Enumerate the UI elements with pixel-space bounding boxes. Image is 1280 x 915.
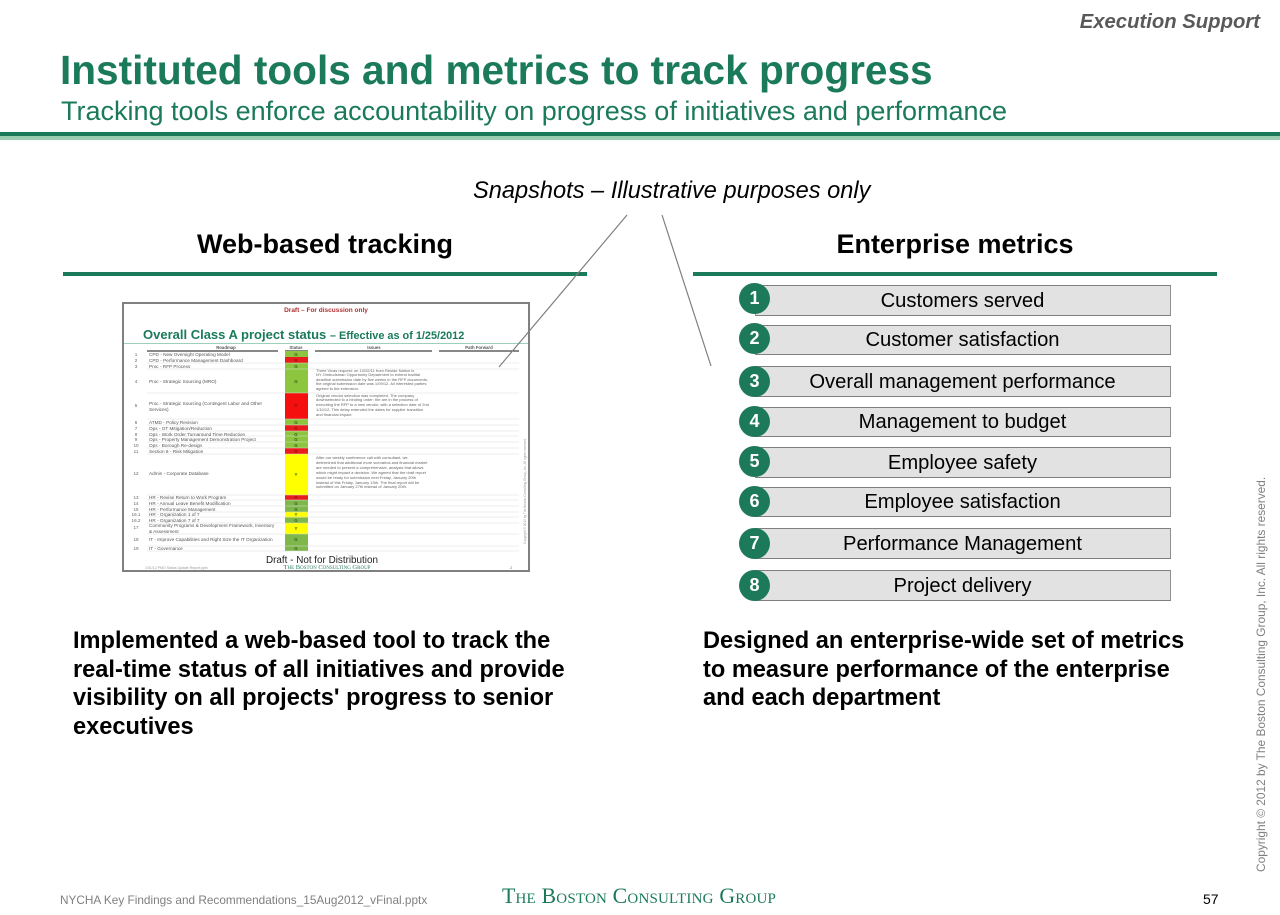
status letters: Y bbox=[295, 526, 298, 531]
row names: CPD - New Oversight Operating Model bbox=[149, 352, 230, 357]
status letters: R bbox=[294, 495, 298, 500]
status letters: G bbox=[294, 507, 298, 512]
row names: HR - Organization 1 of 7 bbox=[149, 512, 200, 517]
row names: Ops - Property Management Demonstration Project bbox=[149, 437, 257, 442]
row names: Ops - OT Mitigation/Reduction bbox=[149, 426, 212, 431]
snapshot: project status report: Draft – For discussion only bbox=[284, 307, 368, 314]
text block: enterprise metrics: and each department bbox=[703, 685, 940, 711]
heading rule: web-based tracking bbox=[63, 272, 587, 276]
status letters: G bbox=[294, 379, 298, 384]
issues text: agreed to the extension. bbox=[316, 386, 359, 391]
row numbers: 16.1 bbox=[132, 512, 141, 517]
metric 2 bbox=[739, 323, 1171, 355]
row numbers: 6 bbox=[135, 420, 138, 425]
snapshot: project status report: Copyright © 2012 by The Boston Consulting Group, Inc. All rights reserved. bbox=[523, 438, 527, 544]
snapshot: project status report bbox=[122, 302, 530, 572]
metric 3: Overall management performance bbox=[809, 371, 1116, 393]
row numbers: 7 bbox=[135, 426, 138, 431]
issues text: Original vendor selection was completed. The company bbox=[316, 393, 414, 398]
section tag: Execution Support: Execution Support bbox=[1080, 11, 1260, 33]
row names: & Assessment bbox=[149, 529, 179, 534]
row names: Proc - Strategic Sourcing (MRO) bbox=[149, 379, 217, 384]
snapshot: project status report: Draft - Not for Distribution bbox=[266, 555, 378, 566]
row numbers: 15 bbox=[133, 507, 139, 512]
issues text: Three Vivas request: on 10/02/11 from Reside Nation in bbox=[316, 368, 414, 373]
issues text: downselected to a binding order; the are in the process of bbox=[316, 397, 419, 402]
row numbers: 14 bbox=[133, 501, 139, 506]
row names: Services) bbox=[149, 407, 169, 412]
snapshot: project status report: Issues bbox=[367, 345, 381, 350]
issues text: would be ready for submission next Friday, January 20th bbox=[316, 475, 416, 480]
heading: Web-based tracking: Web-based tracking bbox=[197, 229, 453, 259]
row numbers: 5 bbox=[135, 403, 138, 408]
status letters: G bbox=[294, 518, 298, 523]
status letters: G bbox=[294, 364, 298, 369]
row names: IT - Improve Capabilities and Right Size the IT Organization bbox=[149, 537, 273, 542]
row numbers: 17 bbox=[133, 525, 139, 530]
status letters: R bbox=[294, 358, 298, 363]
logo: The Boston Consulting Group: The Boston Consulting Group bbox=[502, 884, 776, 908]
issues text: executing the RFP to a new vendor, with a selection date of 2nd bbox=[316, 402, 429, 407]
status letters: G bbox=[294, 420, 298, 425]
metric 6 bbox=[739, 486, 1171, 517]
metric 1: 1 bbox=[749, 288, 760, 308]
status letters: G bbox=[294, 537, 298, 542]
title: Instituted tools and metrics to track progress bbox=[60, 47, 933, 93]
row numbers: 10 bbox=[133, 443, 139, 448]
metric 7: Performance Management bbox=[843, 533, 1082, 555]
issues text: the original submission date was 1/09/12. All interested parties bbox=[316, 381, 427, 386]
status letters: G bbox=[294, 501, 298, 506]
status letters: G bbox=[294, 432, 298, 437]
row names: ATMD - Policy Revision bbox=[149, 420, 198, 425]
snapshot: project status report: Overall Class A project status – Effective as of 1/25/2012 bbox=[143, 327, 464, 342]
status column bbox=[285, 351, 308, 551]
row names: HR - Annual Leave Benefit Modification bbox=[149, 501, 231, 506]
status letters: G bbox=[294, 352, 298, 357]
row names: HR - Revise Return to Work Program bbox=[149, 495, 226, 500]
status letters: R bbox=[294, 426, 298, 431]
issues text: are needed to present a comprehensive, analysis that allows bbox=[316, 465, 423, 470]
issues text: which might impact a decision. We agreed that the draft report bbox=[316, 470, 427, 475]
metric 3: 3 bbox=[749, 371, 760, 391]
text block: web-based tool: executives bbox=[73, 714, 194, 740]
issues text: 1/10/12. This delay extended the dates for supplier transition bbox=[316, 407, 423, 412]
row names: IT - Governance bbox=[149, 546, 183, 551]
row separators bbox=[147, 363, 519, 551]
status letters: R bbox=[294, 449, 298, 454]
issues text: After our weekly conference call with consultant, we bbox=[316, 455, 408, 460]
issues text: submitted on January 27th instead of January 20th. bbox=[316, 484, 407, 489]
metric 4: Management to budget bbox=[859, 411, 1066, 433]
row numbers: 8 bbox=[135, 432, 138, 437]
row numbers bbox=[132, 352, 141, 551]
row numbers: 13 bbox=[133, 495, 139, 500]
row names: Proc - RFP Process bbox=[149, 364, 191, 369]
metric 4 bbox=[739, 406, 1171, 437]
row names: CPD - Performance Management Dashboard bbox=[149, 358, 243, 363]
status letters: Y bbox=[295, 512, 298, 517]
snapshot: project status report: The Boston Consulting Group bbox=[284, 564, 371, 571]
row names: Ops - Borough Re-design bbox=[149, 443, 203, 448]
status letters: R bbox=[294, 403, 298, 408]
row numbers: 16.2 bbox=[132, 518, 141, 523]
row numbers: 3 bbox=[135, 364, 138, 369]
page number: 57 bbox=[1203, 891, 1219, 907]
text block: enterprise metrics bbox=[703, 628, 1184, 711]
metric 8: 8 bbox=[749, 575, 760, 595]
row names: Section 8 - Risk Mitigation bbox=[149, 449, 204, 454]
text block: web-based tool bbox=[73, 628, 565, 740]
row numbers: 11 bbox=[134, 449, 139, 454]
snapshot: project status report: Roadmap bbox=[216, 345, 236, 350]
metrics list bbox=[739, 283, 1171, 601]
copyright note: Copyright © 2012 by The Boston Consulting Group, Inc. All rights reserved. bbox=[1254, 477, 1268, 872]
issues text: and financial impact. bbox=[316, 412, 352, 417]
row names: Proc - Strategic Sourcing (Contingent Labor and Other bbox=[149, 401, 263, 406]
text block: web-based tool: real-time status of all initiatives and provide bbox=[73, 657, 565, 683]
row names: HR - Organization 7 of 7 bbox=[149, 518, 200, 523]
heading rule: enterprise metrics bbox=[693, 272, 1217, 276]
metric 2: 2 bbox=[749, 328, 760, 348]
metric 8 bbox=[739, 570, 1171, 601]
metric 6: 6 bbox=[749, 491, 760, 511]
metric 1 bbox=[739, 283, 1171, 316]
text block: web-based tool: visibility on all projects' progress to senior bbox=[73, 685, 553, 711]
heading: Enterprise metrics: Enterprise metrics bbox=[836, 229, 1074, 259]
snapshot: project status report: Status bbox=[289, 345, 303, 350]
row names bbox=[149, 352, 275, 551]
metric 1: Customers served bbox=[881, 290, 1044, 312]
title rule bbox=[0, 132, 1280, 140]
metric 5: Employee safety bbox=[888, 452, 1037, 474]
row names: Admin - Corporate Database bbox=[149, 471, 209, 476]
row names: Community Programs & Development Framework, Inventory bbox=[149, 523, 275, 528]
metric 3 bbox=[739, 366, 1171, 397]
snapshot: project status report: Path Forward bbox=[465, 345, 493, 350]
metric 2: Customer satisfaction bbox=[865, 329, 1060, 351]
issues text: deadline submission date by five weeks in the RFP documents; bbox=[316, 377, 428, 382]
issues text: instead of this Friday, January 13th. The final report will be bbox=[316, 480, 420, 485]
row numbers: 4 bbox=[135, 379, 138, 384]
metric 6: Employee satisfaction bbox=[864, 491, 1061, 513]
row numbers: 12 bbox=[133, 471, 139, 476]
row numbers: 2 bbox=[135, 358, 138, 363]
row numbers: 1 bbox=[135, 352, 138, 357]
metric 5 bbox=[739, 446, 1171, 478]
text block: web-based tool: Implemented a web-based tool to track the bbox=[73, 628, 550, 654]
row numbers: 19 bbox=[133, 546, 139, 551]
row numbers: 18 bbox=[133, 537, 139, 542]
status letters: G bbox=[294, 437, 298, 442]
row names: Ops - Work Order Turnaround Time Reduction bbox=[149, 432, 245, 437]
metric 7: 7 bbox=[749, 533, 760, 553]
metric 4: 4 bbox=[749, 411, 760, 431]
snapshots note: Snapshots – Illustrative purposes only bbox=[473, 178, 870, 204]
subtitle: Tracking tools enforce accountability on progress of initiatives and performance bbox=[61, 96, 1007, 126]
text block: enterprise metrics: to measure performance of the enterprise bbox=[703, 657, 1170, 683]
issues text: NY Ombudsman Opportunity Department to extend tradital bbox=[316, 372, 420, 377]
status letters: Y bbox=[295, 472, 298, 477]
issues text: determined that additional more scenarios and financial market bbox=[316, 460, 428, 465]
issues text bbox=[316, 368, 429, 489]
snapshot: project status report: 1/31/12 PMO Status Update Report.pptx bbox=[145, 566, 208, 570]
metric 7 bbox=[739, 528, 1171, 559]
text block: enterprise metrics: Designed an enterprise-wide set of metrics bbox=[703, 628, 1184, 654]
row names: HR - Performance Management bbox=[149, 507, 216, 512]
callout lines bbox=[498, 214, 712, 368]
row numbers: 9 bbox=[135, 437, 138, 442]
status letters bbox=[294, 352, 298, 551]
metric 8: Project delivery bbox=[893, 575, 1032, 597]
metric 5: 5 bbox=[749, 451, 760, 471]
snapshot: project status report: 2 bbox=[510, 565, 513, 570]
status letters: G bbox=[294, 443, 298, 448]
status letters: G bbox=[294, 546, 298, 551]
footer file name: NYCHA Key Findings and Recommendations_15Aug2012_vFinal.pptx bbox=[60, 893, 427, 907]
